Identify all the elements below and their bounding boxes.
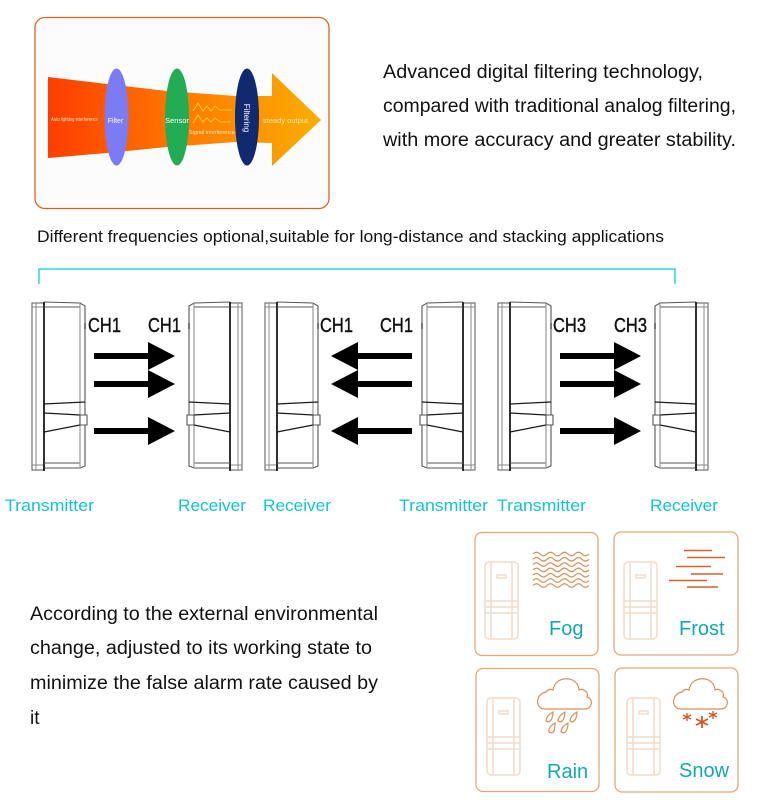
signal interference waves: Signal interference xyxy=(189,130,235,136)
card: frost xyxy=(614,532,738,655)
label: rain: Rain xyxy=(547,761,588,783)
channel labels: CH3 xyxy=(553,314,586,337)
lens: sensor xyxy=(165,68,189,166)
card: snow xyxy=(615,668,738,792)
description: environment adaptation: change, adjusted to its working state to xyxy=(30,638,372,659)
lens: filtering xyxy=(235,68,259,166)
device role labels xyxy=(5,496,718,515)
icon: rain cloud xyxy=(538,679,591,733)
description: digital filtering: with more accuracy and greater stability. xyxy=(382,130,736,151)
icon: frost lines xyxy=(669,550,725,587)
device role labels: Transmitter xyxy=(497,496,586,515)
device: transmitter 3 xyxy=(498,302,553,471)
description: digital filtering: Advanced digital filtering technology, xyxy=(383,62,703,83)
channel labels: CH1 xyxy=(148,314,181,337)
panel: filtering diagram xyxy=(35,18,329,208)
device: receiver 2 xyxy=(265,302,320,471)
label: fog: Fog xyxy=(549,618,583,640)
channel labels: CH1 xyxy=(88,314,121,337)
channel labels: CH1 xyxy=(320,314,353,337)
icon: snowflakes xyxy=(683,711,717,728)
device role labels: Transmitter xyxy=(5,496,94,515)
arrow: signal flow xyxy=(48,73,321,166)
device: receiver 1 xyxy=(187,302,242,471)
lens: filter xyxy=(104,68,128,166)
arrows: right xyxy=(560,342,641,445)
channel labels xyxy=(320,314,413,337)
device role labels: Transmitter xyxy=(399,496,488,515)
channel labels: CH3 xyxy=(614,314,647,337)
channel labels xyxy=(553,314,647,337)
description: digital filtering xyxy=(382,62,736,151)
device role labels: Receiver xyxy=(178,496,246,515)
signal interference waves xyxy=(189,103,235,136)
label: auto lighting interference: Auto lighting interference xyxy=(51,117,98,123)
description: environment adaptation: minimize the false alarm rate caused by xyxy=(30,673,379,694)
channel labels: CH1 xyxy=(380,314,413,337)
description: digital filtering: compared with traditional analog filtering, xyxy=(383,96,736,117)
device role labels: Receiver xyxy=(263,496,331,515)
description: environment adaptation xyxy=(30,604,379,729)
icon: snow cloud xyxy=(674,679,727,709)
device: transmitter 1 xyxy=(32,302,87,471)
label: steady output: steady output xyxy=(263,116,309,125)
card: rain xyxy=(476,668,599,792)
label: frost: Frost xyxy=(679,618,725,640)
device: transmitter 2 xyxy=(420,302,475,471)
lens: filter: Filter xyxy=(108,118,124,125)
lens: sensor: Sensor xyxy=(165,116,189,125)
arrows: right xyxy=(94,342,175,445)
device role labels: Receiver xyxy=(650,496,718,515)
lens: filtering: Filtering xyxy=(242,104,251,132)
card: fog xyxy=(475,532,598,656)
pair 1: CH1 transmitter to receiver xyxy=(32,302,242,471)
pair 3: CH3 transmitter to receiver xyxy=(498,302,708,471)
arrows: left xyxy=(331,342,412,445)
description: environment adaptation: it xyxy=(30,708,40,729)
channel labels xyxy=(88,314,181,337)
pair 2: CH1 receiver from transmitter xyxy=(265,302,475,471)
heading: frequencies: Different frequencies optional,suitable for long-distance and stacking applications xyxy=(37,228,664,246)
device: receiver 3 xyxy=(653,302,708,471)
icon: fog waves xyxy=(533,552,589,587)
label: snow: Snow xyxy=(679,760,730,782)
bracket xyxy=(39,269,675,284)
description: environment adaptation: According to the external environmental xyxy=(30,604,378,625)
